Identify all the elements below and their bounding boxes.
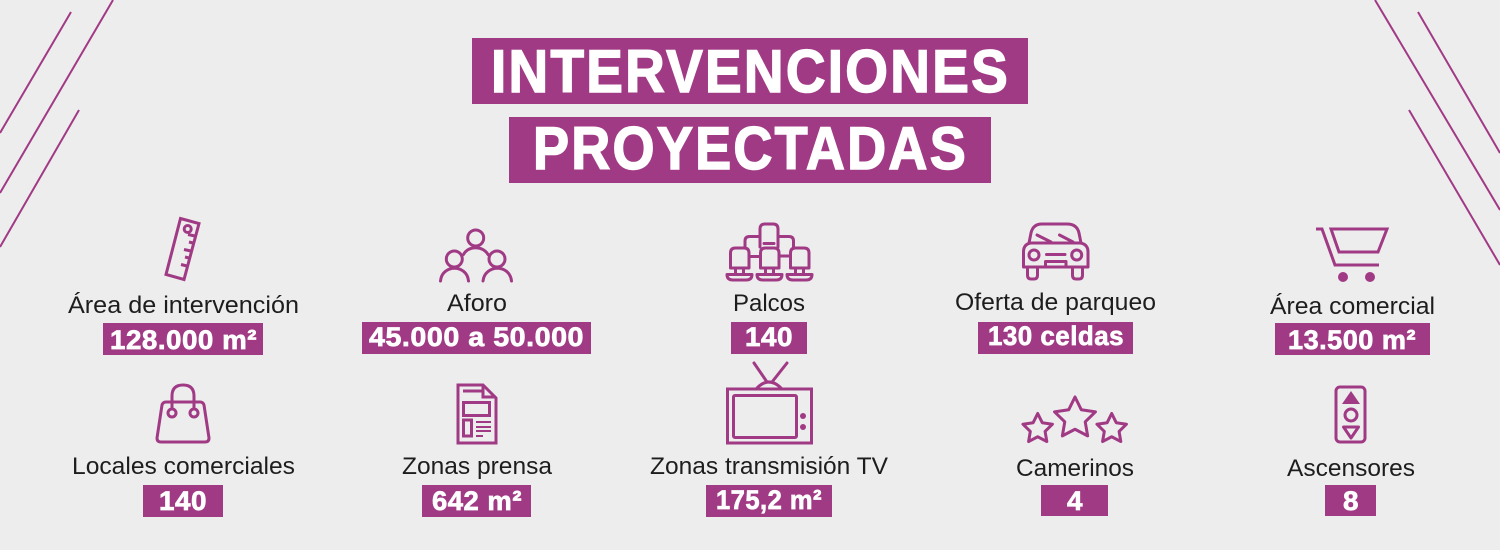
icon: television: [728, 363, 812, 443]
icon: newspaper: [458, 385, 496, 443]
panel: zonas transmisión TV: [650, 363, 888, 517]
label: Zonas transmisión TV: [650, 453, 888, 480]
value: 4: [1067, 486, 1083, 516]
icon: ruler: [166, 218, 199, 280]
title: [472, 38, 1028, 183]
value: 140: [745, 322, 793, 352]
icon: elevator buttons: [1336, 387, 1365, 442]
value: 140: [159, 486, 207, 516]
value: [143, 485, 223, 517]
value: 130 celdas: [988, 321, 1124, 351]
panel: área comercial: [1270, 229, 1435, 355]
panel: locales comerciales: [72, 385, 295, 517]
value: 45.000 a 50.000: [369, 322, 584, 352]
label: Zonas prensa: [402, 453, 553, 480]
label: Palcos: [733, 290, 805, 317]
label: Aforo: [447, 290, 507, 317]
panel: camerinos: [1016, 397, 1134, 516]
panel: oferta de parqueo: [955, 224, 1156, 354]
title line 1: INTERVENCIONES: [491, 38, 1010, 105]
panel: zonas prensa: [402, 385, 553, 517]
label: Oferta de parqueo: [955, 289, 1156, 316]
icon: shopping bag: [157, 385, 209, 442]
value: 642 m²: [432, 486, 522, 516]
icon: car: [1024, 224, 1088, 279]
label: Área de intervención: [68, 292, 299, 319]
label: Locales comerciales: [72, 453, 295, 480]
value: 128.000 m²: [110, 325, 257, 355]
icon: stars: [1023, 397, 1126, 442]
panel: palcos: [727, 224, 812, 354]
label: Área comercial: [1270, 293, 1435, 320]
icon: seats: [727, 224, 812, 280]
panel: ascensores: [1287, 387, 1415, 516]
label: Ascensores: [1287, 455, 1415, 482]
value: 13.500 m²: [1288, 325, 1416, 355]
panel: área de intervención: [68, 218, 299, 355]
icon: people: [440, 230, 512, 281]
value: 8: [1343, 486, 1359, 516]
icon: shopping cart: [1316, 229, 1387, 282]
value: 175,2 m²: [716, 485, 822, 515]
panel: aforo: [362, 230, 591, 354]
title line 2: PROYECTADAS: [533, 115, 968, 182]
label: Camerinos: [1016, 455, 1134, 482]
